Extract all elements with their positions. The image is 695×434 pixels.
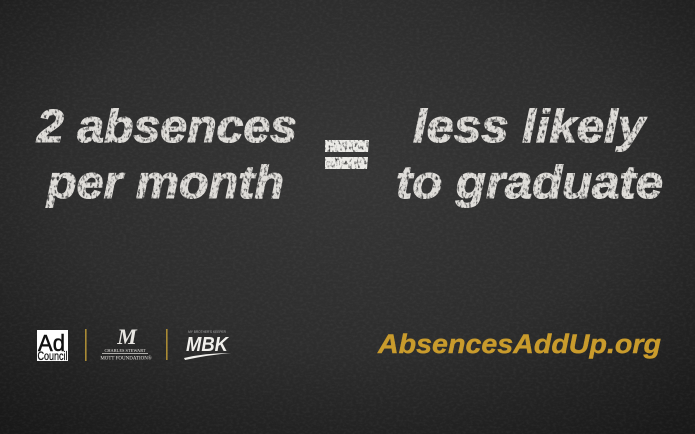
logo: MBK: MBK (186, 334, 229, 356)
headline: less likely to graduate (396, 100, 663, 208)
logo: Mott Foundation (100, 324, 152, 362)
logo: MBK (184, 330, 231, 360)
logo: Mott Foundation: M (116, 324, 138, 349)
logo: Mott Foundation: CHARLES STEWART (104, 348, 146, 353)
logo: Mott Foundation: MOTT FOUNDATION® (100, 356, 152, 362)
headline: less likely to graduate: to graduate (396, 156, 663, 208)
gold divider 2 (166, 329, 168, 360)
headline: 2 absences per month: per month (45, 156, 284, 208)
logo: Ad Council: Council (38, 351, 68, 363)
logo: MBK: MY BROTHER'S KEEPER (188, 330, 227, 334)
headline: 2 absences per month: 2 absences (36, 100, 297, 152)
equals sign (325, 140, 369, 169)
headline: 2 absences per month (36, 100, 297, 208)
website URL: AbsencesAddUp.org (377, 329, 662, 359)
headline: less likely to graduate: less likely (413, 100, 648, 152)
logo: Ad Council: Ad (38, 330, 65, 356)
gold divider 1 (85, 329, 87, 361)
